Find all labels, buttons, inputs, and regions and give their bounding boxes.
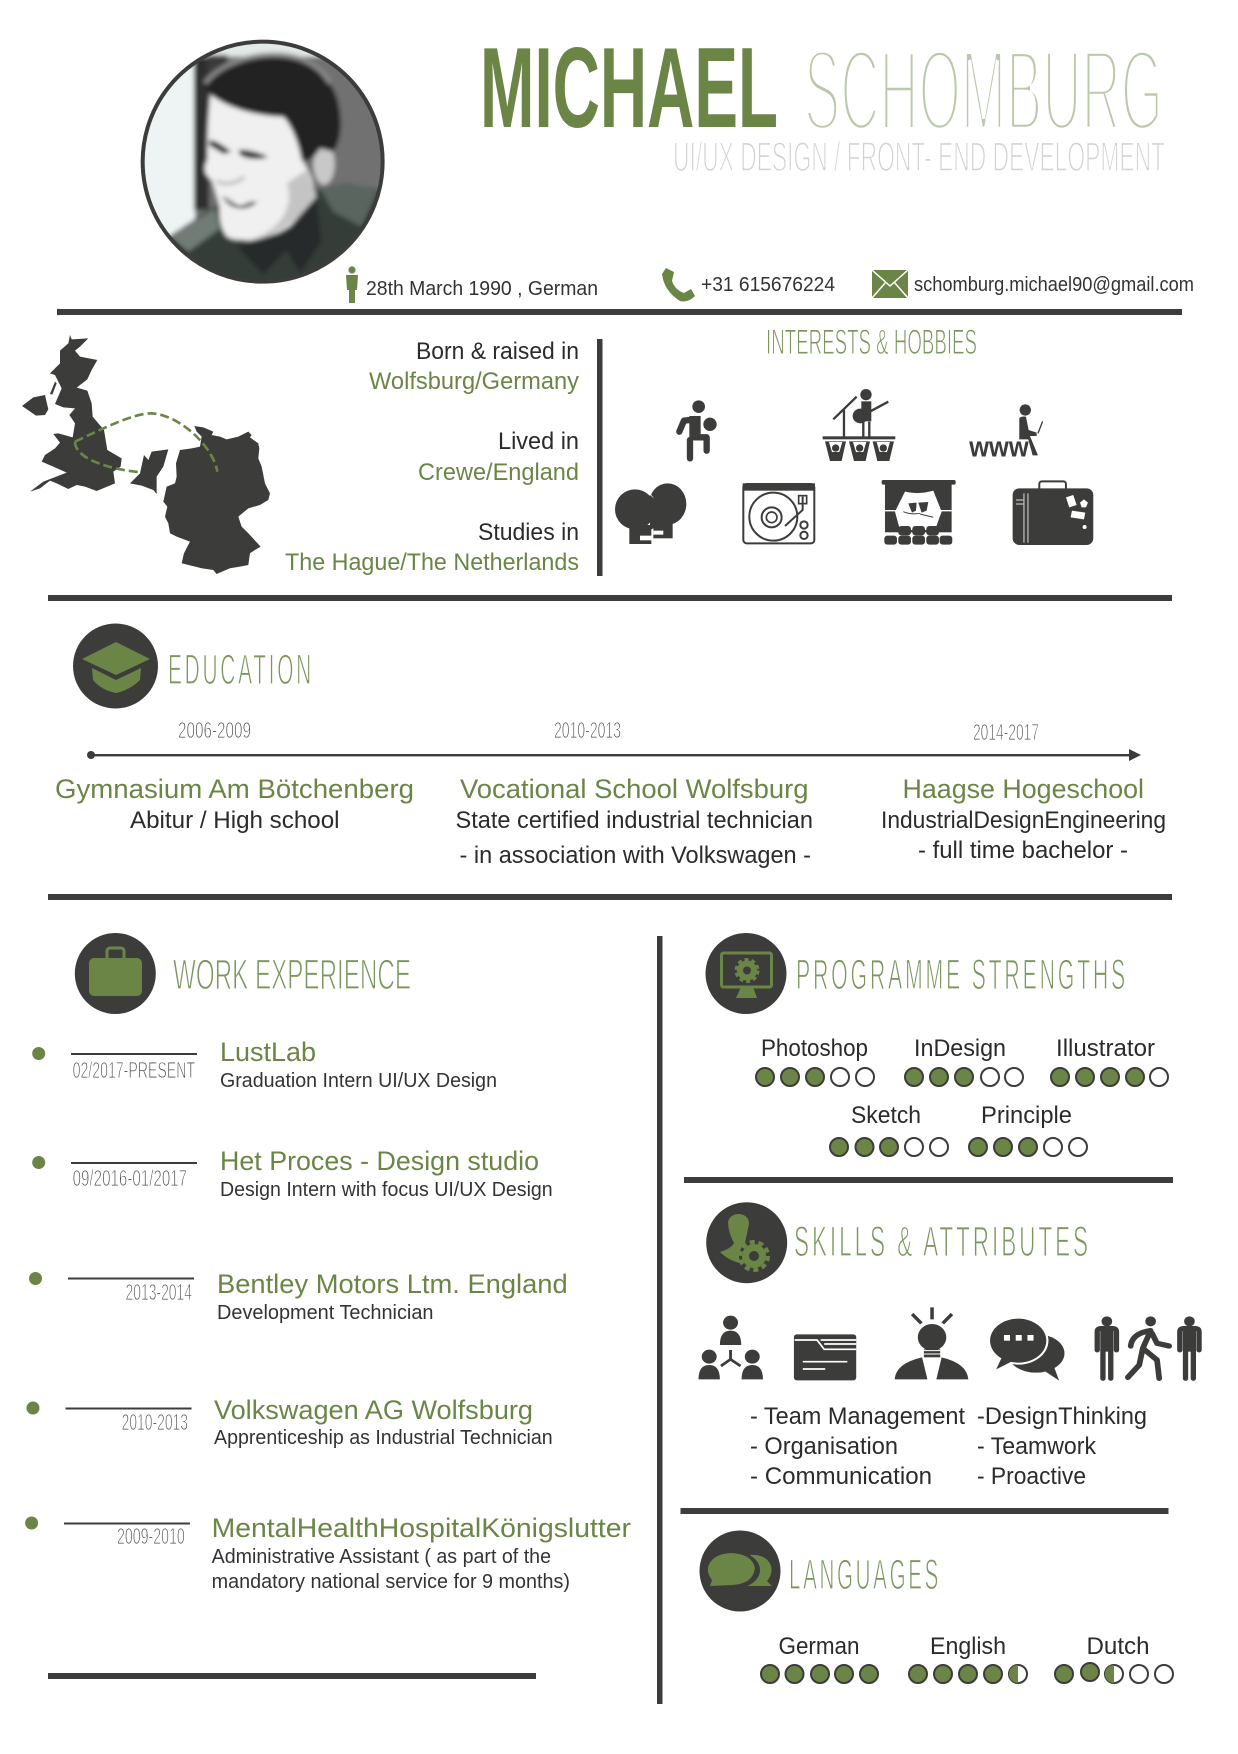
job: mental health hospital: MentalHealthHospitalKönigslutter xyxy=(212,1513,631,1543)
school: vocational xyxy=(456,774,813,869)
skill: principle: Principle xyxy=(981,1102,1072,1129)
job: het proces xyxy=(32,1146,553,1201)
places lived: Lived in xyxy=(498,428,579,455)
icon: speech bubbles xyxy=(988,1317,1064,1381)
icon: graduation cap xyxy=(73,624,158,708)
skills list: - Organisation xyxy=(750,1433,898,1460)
icon: phone xyxy=(662,268,695,301)
skills list: - Team Management xyxy=(750,1403,965,1430)
school: haagse hogeschool: - full time bachelor - xyxy=(918,837,1128,864)
icon: briefcase xyxy=(75,933,156,1014)
job: mental health hospital: 2009-2010 xyxy=(117,1523,185,1549)
job: mental health hospital: Administrative Assistant ( as part of the xyxy=(212,1546,551,1568)
icon: speech bubbles xyxy=(700,1530,780,1612)
skill: illustrator: Illustrator xyxy=(1056,1035,1155,1062)
language: dutch xyxy=(1055,1633,1173,1683)
skill: photoshop: Photoshop xyxy=(761,1035,868,1062)
heading: interests and hobbies: INTERESTS & HOBBIES xyxy=(766,323,977,362)
section: work experience xyxy=(25,933,631,1593)
icon: people walking xyxy=(1097,1316,1199,1378)
timeline arrow xyxy=(87,749,1141,761)
school: haagse hogeschool: Haagse Hogeschool xyxy=(902,774,1144,804)
section: languages: LANGUAGES xyxy=(789,1551,941,1599)
icon: folder xyxy=(794,1334,856,1380)
skills icons xyxy=(699,1307,1199,1381)
heading: work experience: WORK EXPERIENCE xyxy=(173,951,411,999)
school: vocational: Vocational School Wolfsburg xyxy=(460,774,808,804)
job: volkswagen: Apprenticeship as Industrial Technician xyxy=(214,1427,553,1449)
school: gymnasium: Abitur / High school xyxy=(130,807,340,834)
timeline dates: 2010-2013 xyxy=(554,717,621,743)
skill: indesign: InDesign xyxy=(914,1035,1006,1062)
icon: suitcase xyxy=(1013,481,1093,545)
skill: indesign xyxy=(905,1035,1023,1086)
school: gymnasium xyxy=(55,774,414,834)
language: english xyxy=(909,1633,1027,1683)
icon: www laptop user xyxy=(968,404,1043,464)
places lived xyxy=(285,338,579,576)
icon: idea person xyxy=(895,1307,968,1379)
job: bentley xyxy=(29,1269,568,1324)
icon: person xyxy=(346,266,358,303)
skill: photoshop xyxy=(756,1035,874,1086)
section: languages xyxy=(700,1530,1173,1683)
skill: sketch: Sketch xyxy=(851,1102,921,1129)
skill: sketch xyxy=(830,1102,948,1156)
job: bentley: Development Technician xyxy=(217,1302,434,1324)
language: dutch: Dutch xyxy=(1086,1633,1150,1660)
language: german: German xyxy=(778,1633,860,1660)
icon: www laptop user: www xyxy=(968,432,1029,464)
job: mental health hospital xyxy=(25,1513,631,1593)
job: lustlab: LustLab xyxy=(220,1037,316,1067)
section: programme strengths xyxy=(706,933,1168,1156)
places lived: Studies in xyxy=(478,519,579,546)
job: volkswagen xyxy=(26,1395,553,1449)
job: het proces: 09/2016-01/2017 xyxy=(73,1165,187,1191)
skills list: - Proactive xyxy=(977,1463,1086,1490)
icon: turntable xyxy=(743,483,815,543)
skills list: - Teamwork xyxy=(977,1433,1097,1460)
icon: monitor xyxy=(706,933,786,1014)
birth date: 28th March 1990 , German xyxy=(366,278,598,300)
skill: illustrator xyxy=(1051,1035,1168,1086)
section: skills and attributes xyxy=(699,1202,1199,1490)
interest icons xyxy=(613,389,1093,545)
icon: football xyxy=(679,400,717,458)
icon: concert xyxy=(823,389,895,461)
timeline dates xyxy=(178,717,1039,745)
job: volkswagen: 2010-2013 xyxy=(122,1409,188,1435)
skills list xyxy=(750,1403,1147,1490)
job: lustlab: 02/2017-PRESENT xyxy=(73,1057,195,1083)
portrait photo xyxy=(140,37,387,293)
title xyxy=(480,25,1165,180)
email: schomburg.michael90@gmail.com xyxy=(914,274,1194,296)
school: vocational: - in association with Volkswagen - xyxy=(460,842,811,869)
icon: envelope xyxy=(872,270,908,298)
job: mental health hospital: mandatory national service for 9 months) xyxy=(212,1571,570,1593)
school: haagse hogeschool xyxy=(881,774,1166,864)
job: lustlab xyxy=(32,1037,497,1092)
job: lustlab: Graduation Intern UI/UX Design xyxy=(220,1070,497,1092)
title: MICHAEL xyxy=(480,25,778,152)
map of UK, Netherlands and Germany xyxy=(22,335,270,574)
language: english: English xyxy=(930,1633,1006,1660)
job: bentley: 2013-2014 xyxy=(126,1279,192,1305)
job: bentley: Bentley Motors Ltm. England xyxy=(217,1269,568,1299)
timeline dates: 2006-2009 xyxy=(178,717,251,743)
job: het proces: Het Proces - Design studio xyxy=(220,1146,539,1176)
icon: person with gear xyxy=(706,1202,787,1283)
job: volkswagen: Volkswagen AG Wolfsburg xyxy=(214,1395,533,1425)
places lived: Crewe/England xyxy=(418,459,579,486)
timeline dates: 2014-2017 xyxy=(973,719,1039,745)
places lived: Wolfsburg/Germany xyxy=(369,368,579,395)
phone number: +31 615676224 xyxy=(701,274,835,296)
icon: boxing gloves xyxy=(613,483,686,544)
icon: team xyxy=(699,1316,763,1379)
school: gymnasium: Gymnasium Am Bötchenberg xyxy=(55,774,414,804)
skills list: -DesignThinking xyxy=(977,1403,1147,1430)
job: het proces: Design Intern with focus UI/UX Design xyxy=(220,1179,553,1201)
places lived: Born & raised in xyxy=(416,338,579,365)
school: haagse hogeschool: IndustrialDesignEngineering xyxy=(881,807,1166,834)
section: education: EDUCATION xyxy=(168,646,314,694)
skill: principle xyxy=(969,1102,1087,1156)
icon: theatre xyxy=(882,480,956,545)
skills list: - Communication xyxy=(750,1463,932,1490)
section: education xyxy=(55,624,1166,869)
language: german xyxy=(761,1633,878,1683)
contact row xyxy=(346,266,1194,303)
places lived: The Hague/The Netherlands xyxy=(285,549,579,576)
school: vocational: State certified industrial technician xyxy=(456,807,813,834)
